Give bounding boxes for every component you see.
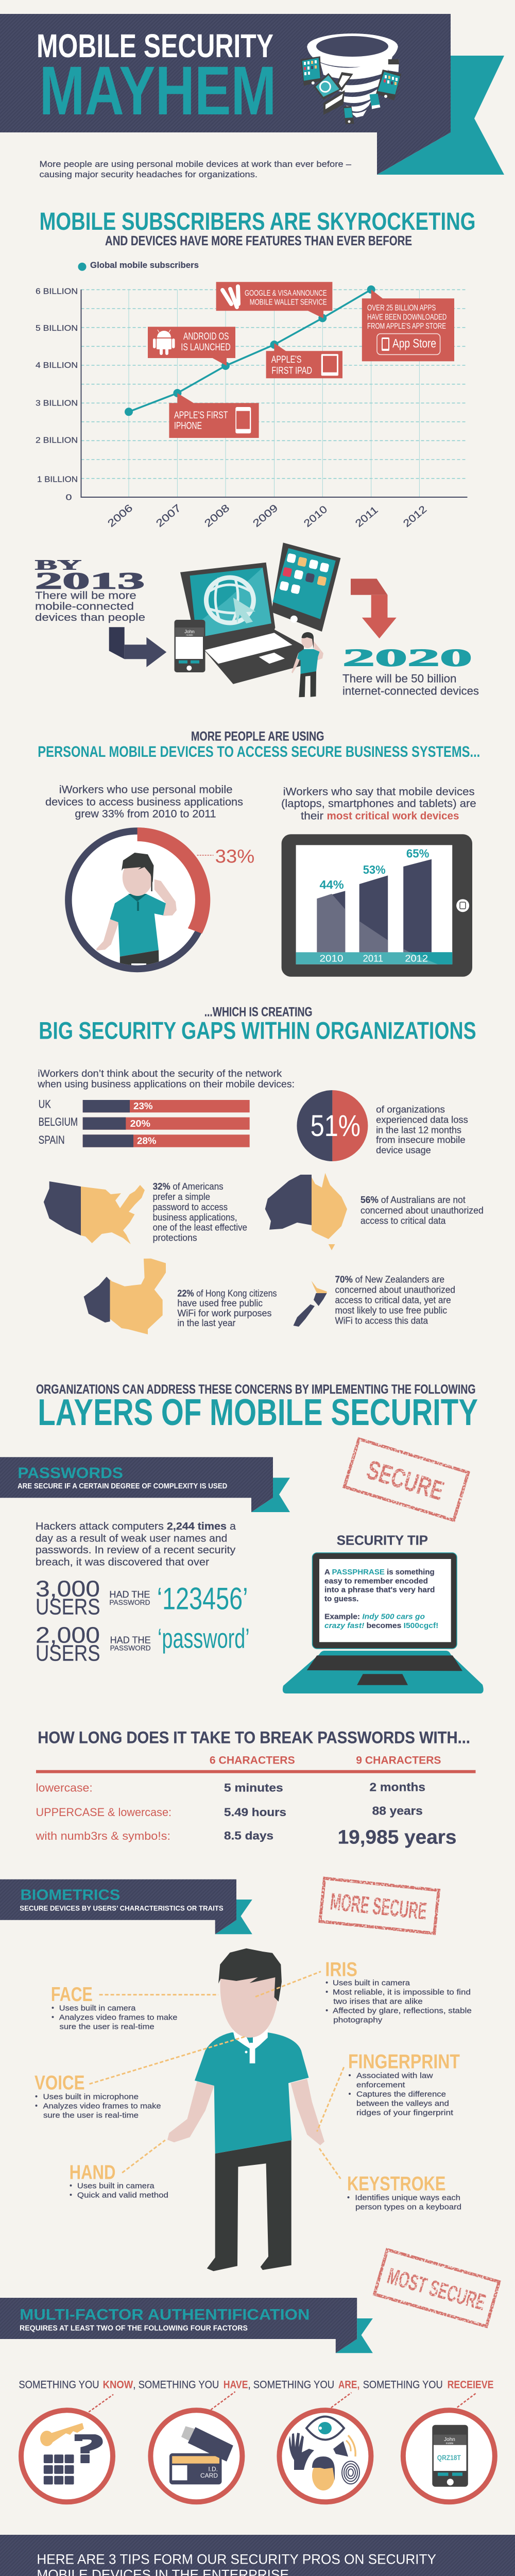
map stat: new zealand bbox=[294, 1274, 455, 1327]
security tip: laptop: SECURITY TIP bbox=[337, 1532, 428, 1548]
year strip: 2010 bbox=[319, 954, 343, 964]
laptop bbox=[180, 563, 304, 684]
security tip: laptop bbox=[283, 1532, 484, 1693]
year strip: 2012 bbox=[405, 954, 428, 964]
banner: passwords: PASSWORDS bbox=[18, 1465, 123, 1482]
icon: card reader bbox=[181, 2426, 233, 2462]
pie chart: 51%: from insecure mobile bbox=[376, 1135, 466, 1145]
callout: first ipad: APPLE'S bbox=[271, 354, 302, 365]
face bbox=[220, 1968, 279, 2038]
pie chart: 51%: 51% bbox=[311, 1109, 360, 1143]
row: lowercase: 2 months bbox=[370, 1781, 425, 1794]
year strip bbox=[296, 952, 452, 964]
text: iworkers personal devices bbox=[45, 784, 243, 820]
icon: phone with code bbox=[432, 2425, 468, 2487]
x axis years: 2011 bbox=[353, 504, 381, 530]
bar: belgium: BELGIUM bbox=[39, 1115, 78, 1128]
stat: 3,000 users: PASSWORD bbox=[109, 1598, 150, 1606]
row: numbers and symbols bbox=[35, 1826, 456, 1848]
label: keystroke: KEYSTROKE bbox=[347, 2173, 445, 2195]
x axis years: 2012 bbox=[401, 504, 429, 530]
y axis labels: 2 BILLION bbox=[36, 436, 78, 445]
text: by 2013: mobile-connected bbox=[35, 601, 134, 613]
x axis years: 2007 bbox=[154, 502, 183, 530]
text: hackers attack: Hackers attack computers 2,244 times a bbox=[36, 1521, 236, 1532]
laptop screen: to guess. bbox=[324, 1595, 358, 1603]
x axis years: 2010 bbox=[302, 504, 330, 530]
illustration: devices and person bbox=[174, 543, 340, 697]
heading: security gaps: ...WHICH IS CREATING bbox=[204, 1005, 312, 1019]
text: factors line: KNOW bbox=[103, 2379, 133, 2391]
arms bbox=[167, 2079, 324, 2145]
year strip: 2011 bbox=[363, 954, 383, 964]
label: voice: sure the user is real-time bbox=[43, 2111, 139, 2120]
callout: android os: ANDROID OS bbox=[183, 331, 229, 342]
stat: 3,000 users: 3,000 bbox=[36, 1576, 100, 1601]
bar: spain bbox=[39, 1133, 250, 1147]
icon: id card bbox=[169, 2453, 221, 2484]
phone: mobile bbox=[186, 634, 193, 636]
hair bbox=[218, 1948, 282, 2002]
row: mixed case: 88 years bbox=[372, 1804, 423, 1817]
pie chart: 51% bbox=[297, 1090, 468, 1161]
intro text: More people are using personal mobile devices at work than ever before – bbox=[39, 159, 352, 169]
intro text: causing major security headaches for organizations. bbox=[39, 170, 258, 179]
map stat: china: in the last year bbox=[177, 1318, 235, 1328]
x axis years bbox=[106, 502, 429, 530]
stat: 2,000 users: HAD THE bbox=[110, 1635, 151, 1645]
icon: phone with code: mobile bbox=[446, 2442, 454, 2445]
map stat: new zealand: WiFi to access this data bbox=[335, 1315, 428, 1326]
text: hackers attack: breach, it was discovered that over bbox=[36, 1556, 210, 1568]
intro text bbox=[39, 159, 352, 179]
table: time to break passwords bbox=[35, 1728, 476, 1848]
icon: eye bbox=[306, 2416, 344, 2440]
label: voice bbox=[35, 2036, 246, 2120]
callout: app store: FROM APPLE'S APP STORE bbox=[367, 322, 446, 331]
stat: 2,000 users: USERS bbox=[36, 1640, 100, 1666]
y axis labels bbox=[36, 287, 78, 502]
banner: multi-factor authentification: REQUIRES AT LEAST TWO OF THE FOLLOWING FOUR FACTORS bbox=[20, 2324, 248, 2332]
y axis labels: 3 BILLION bbox=[36, 399, 78, 408]
label: face: Analyzes video frames to make bbox=[59, 2013, 177, 2022]
bar: belgium: 20% bbox=[130, 1118, 150, 1129]
text: by 2013: 2013 bbox=[35, 568, 145, 594]
bar: uk bbox=[39, 1098, 250, 1112]
row: mixed case: UPPERCASE & lowercase: bbox=[36, 1806, 171, 1819]
map stat: new zealand: concerned about unauthorized bbox=[335, 1284, 455, 1295]
tips heading: HERE ARE 3 TIPS FORM OUR SECURITY PROS ON SECURITY bbox=[37, 2552, 436, 2567]
bar 2010 bbox=[317, 878, 345, 952]
text: factors line bbox=[19, 2379, 493, 2391]
stat: 3,000 users: HAD THE bbox=[109, 1589, 150, 1600]
callout: first iphone: APPLE'S FIRST bbox=[174, 410, 228, 421]
bar 2011: 53% bbox=[363, 863, 386, 876]
arrow: red, to 2020 bbox=[351, 579, 397, 638]
pie chart: 51%: device usage bbox=[376, 1145, 431, 1156]
factor: something you receive bbox=[403, 2394, 495, 2502]
bar 2012: 65% bbox=[406, 846, 430, 860]
label: voice: VOICE bbox=[35, 2072, 84, 2094]
chart: tablet with bars bbox=[282, 834, 472, 977]
text: hackers attack: passwords. In review of a recent security bbox=[36, 1545, 235, 1556]
icon: key bbox=[40, 2423, 84, 2446]
laptop screen: A PASSPHRASE is something bbox=[324, 1568, 435, 1577]
text: factors line: , SOMETHING YOU bbox=[248, 2379, 334, 2391]
label: face bbox=[51, 1984, 218, 2031]
factor: something you are bbox=[279, 2393, 371, 2502]
laptop base bbox=[283, 1651, 484, 1693]
label: fingerprint bbox=[317, 2050, 460, 2131]
bar: spain: 28% bbox=[137, 1136, 157, 1146]
table header: 9 CHARACTERS bbox=[356, 1754, 441, 1766]
laptop screen bbox=[312, 1553, 457, 1649]
icon: id card: CARD bbox=[200, 2472, 218, 2479]
label: face: Uses built in camera bbox=[59, 2004, 136, 2012]
icon: question mark bbox=[75, 2434, 103, 2463]
banner: passwords: ARE SECURE IF A CERTAIN DEGREE OF COMPLEXITY IS USED bbox=[18, 1482, 227, 1490]
heading: more people: MORE PEOPLE ARE USING bbox=[191, 729, 324, 743]
banner panel bbox=[0, 14, 451, 175]
banner: multi-factor authentification bbox=[0, 2298, 373, 2353]
laptop screen: into a phrase that's very hard bbox=[324, 1586, 435, 1595]
text: iworkers personal devices: devices to access business applications bbox=[45, 796, 243, 808]
callout: 33%: 33% bbox=[215, 845, 254, 867]
text: iworkers critical devices bbox=[281, 786, 476, 822]
label: voice: Analyzes video frames to make bbox=[43, 2102, 161, 2110]
row: lowercase bbox=[36, 1781, 425, 1794]
x axis years: 2008 bbox=[202, 502, 232, 530]
label: iris: two irises that are alike bbox=[333, 1997, 423, 2006]
text: factors line: , SOMETHING YOU bbox=[133, 2379, 219, 2391]
y axis labels: 6 BILLION bbox=[36, 287, 78, 296]
label: keystroke: person types on a keyboard bbox=[355, 2203, 461, 2212]
icon: hand bbox=[289, 2433, 314, 2470]
map stat: new zealand: access to critical data, yet are bbox=[335, 1295, 451, 1305]
table header: 6 CHARACTERS bbox=[210, 1754, 295, 1766]
heading: security gaps bbox=[39, 1005, 476, 1044]
map stat: united states: 32% of Americans bbox=[153, 1181, 224, 1192]
pie chart: 51%: of organizations bbox=[376, 1104, 445, 1114]
text: by 2013 bbox=[35, 557, 145, 623]
text: by 2013: BY bbox=[35, 557, 81, 573]
stat: 3,000 users bbox=[36, 1576, 248, 1619]
callout: google and visa: GOOGLE & VISA ANNOUNCE bbox=[245, 289, 327, 298]
text: network security: iWorkers don’t think about the security of the network bbox=[38, 1069, 282, 1079]
y axis labels: 5 BILLION bbox=[36, 324, 78, 333]
table: time to break passwords: HOW LONG DOES IT TAKE TO BREAK PASSWORDS WITH... bbox=[38, 1728, 470, 1747]
map stat: united states: prefer a simple bbox=[153, 1192, 210, 1202]
callout: first ipad: FIRST IPAD bbox=[271, 365, 312, 376]
bar 2010: 44% bbox=[319, 878, 344, 891]
stat: 2,000 users: PASSWORD bbox=[110, 1643, 151, 1652]
factor: something you have bbox=[150, 2392, 242, 2502]
text: iworkers personal devices: grew 33% from 2010 to 2011 bbox=[75, 808, 216, 820]
text: by 2013: devices than people bbox=[35, 612, 145, 623]
label: iris bbox=[255, 1958, 472, 2025]
label: iris: Uses built in camera bbox=[333, 1978, 410, 1987]
bar: spain: SPAIN bbox=[39, 1133, 65, 1146]
label: face: FACE bbox=[51, 1984, 93, 2006]
bar chart: countries bbox=[39, 1098, 250, 1147]
label: iris: Most reliable, it is impossible to find bbox=[333, 1988, 471, 1997]
callout: 33% bbox=[197, 845, 254, 867]
callout: app store: App Store bbox=[392, 337, 436, 351]
map stat: china: have used free public bbox=[177, 1298, 263, 1309]
y axis labels: 0 bbox=[66, 494, 72, 502]
row: numbers and symbols: 8.5 days bbox=[224, 1829, 273, 1842]
text: hackers attack: day as a result of weak user names and bbox=[36, 1533, 227, 1544]
title: mobile security: MOBILE SECURITY bbox=[37, 27, 273, 64]
row: numbers and symbols: 19,985 years bbox=[338, 1826, 456, 1848]
label: hand: HAND bbox=[70, 2161, 115, 2183]
pie chart: 51%: in the last 12 months bbox=[376, 1125, 461, 1135]
label: voice: Uses built in microphone bbox=[43, 2092, 139, 2101]
factor: something you know bbox=[21, 2395, 113, 2502]
text: iworkers personal devices: iWorkers who use personal mobile bbox=[59, 784, 233, 795]
callout: app store: HAVE BEEN DOWNLOADED bbox=[367, 313, 447, 322]
heading: mobile subscribers: AND DEVICES HAVE MORE FEATURES THAN EVER BEFORE bbox=[105, 233, 412, 248]
banner: multi-factor authentification: MULTI-FACTOR AUTHENTIFICATION bbox=[20, 2307, 310, 2324]
text: 2020 bbox=[342, 644, 479, 697]
stat: 2,000 users bbox=[36, 1622, 250, 1666]
title: mayhem: MAYHEM bbox=[39, 53, 276, 129]
map stat: new zealand: 70% of New Zealanders are bbox=[335, 1274, 444, 1284]
label: keystroke: Identifies unique ways each bbox=[355, 2194, 460, 2202]
phone bbox=[174, 620, 205, 672]
label: hand: Uses built in camera bbox=[77, 2182, 154, 2191]
banner: biometrics: SECURE DEVICES BY USERS’ CHARACTERISTICS OR TRAITS bbox=[20, 1904, 224, 1912]
person on phone bbox=[96, 853, 177, 974]
collar and placket bbox=[233, 2029, 268, 2063]
bar: belgium bbox=[39, 1115, 250, 1130]
text: hackers attack bbox=[36, 1521, 236, 1568]
map stat: new zealand: most likely to use free public bbox=[335, 1305, 447, 1315]
label: face: sure the user is real-time bbox=[60, 2022, 154, 2031]
map stat: australia bbox=[265, 1173, 484, 1250]
figure: standing person bbox=[167, 1948, 324, 2271]
label: hand: Quick and valid method bbox=[77, 2191, 168, 2200]
pants bbox=[207, 2140, 291, 2271]
map stat: united states: business applications, bbox=[153, 1212, 237, 1223]
stamp: more secure bbox=[320, 1878, 439, 1934]
row: numbers and symbols: with numb3rs & symbo!s: bbox=[35, 1829, 170, 1842]
stamp: secure bbox=[345, 1439, 468, 1520]
arrow: navy, to devices bbox=[109, 627, 166, 667]
map stat: united states: one of the least effective bbox=[153, 1223, 247, 1233]
label: hand bbox=[70, 2140, 168, 2200]
panel: three tips bbox=[0, 2535, 515, 2576]
callout: app store bbox=[362, 290, 454, 361]
stamp: more secure: MORE SECURE bbox=[329, 1888, 428, 1925]
y axis labels: 1 BILLION bbox=[37, 475, 78, 484]
icon: face bbox=[312, 2456, 335, 2490]
callout: android os: IS LAUNCHED bbox=[181, 342, 231, 353]
icon: speaker bbox=[333, 2435, 355, 2456]
banner: biometrics bbox=[0, 1879, 252, 1934]
text: network security bbox=[37, 1069, 295, 1090]
map stat: china: WiFi for work purposes bbox=[177, 1308, 271, 1318]
row: mixed case: 5.49 hours bbox=[224, 1806, 286, 1819]
callout: first ipad bbox=[266, 343, 342, 378]
header banner bbox=[0, 14, 504, 175]
text: network security: when using business applications on their mobile devices: bbox=[37, 1079, 295, 1090]
text: iworkers critical devices: most critical work devices bbox=[327, 810, 459, 822]
map stat: australia: concerned about unauthorized bbox=[360, 1205, 484, 1215]
callout: google and visa bbox=[216, 282, 332, 318]
stamp: secure: SECURE bbox=[363, 1455, 447, 1506]
label: fingerprint: FINGERPRINT bbox=[348, 2050, 460, 2073]
table header bbox=[36, 1754, 476, 1773]
text: 2020: There will be 50 billion bbox=[342, 672, 456, 685]
banner: passwords bbox=[0, 1457, 290, 1512]
donut segment bbox=[138, 827, 210, 934]
stat: 3,000 users: ‘123456’ bbox=[157, 1581, 248, 1616]
laptop screen: crazy fast! becomes I500cgcf! bbox=[324, 1621, 438, 1630]
callout: first iphone bbox=[169, 393, 259, 438]
small person bbox=[291, 632, 323, 697]
label: fingerprint: between the valleys and bbox=[356, 2099, 449, 2108]
map stat: united states: password to access bbox=[153, 1202, 228, 1212]
label: keystroke bbox=[319, 2148, 461, 2212]
label: fingerprint: Associated with law bbox=[356, 2071, 433, 2080]
chart: 33% donut with person bbox=[65, 827, 254, 974]
text: factors line: HAVE bbox=[224, 2379, 248, 2391]
icon: fingerprint bbox=[342, 2461, 359, 2484]
label: fingerprint: Captures the difference bbox=[356, 2090, 446, 2098]
tablet bbox=[271, 543, 340, 632]
text: iworkers critical devices: (laptops, smartphones and tablets) are bbox=[281, 798, 476, 810]
laptop screen: easy to remember encoded bbox=[324, 1577, 428, 1585]
label: fingerprint: enforcement bbox=[356, 2080, 405, 2089]
text: iworkers critical devices: iWorkers who say that mobile devices bbox=[283, 786, 475, 798]
text: factors line: RECEIEVE bbox=[448, 2379, 493, 2391]
row: mixed case bbox=[36, 1804, 423, 1819]
label: iris: photography bbox=[333, 2016, 383, 2025]
label: iris: IRIS bbox=[325, 1958, 357, 1980]
data line bbox=[125, 285, 375, 416]
stamp: most secure bbox=[374, 2250, 499, 2326]
label: fingerprint: ridges of your fingerprint bbox=[356, 2108, 454, 2117]
stat: 2,000 users: 2,000 bbox=[36, 1622, 100, 1648]
row: lowercase: 5 minutes bbox=[224, 1781, 283, 1794]
icon: phone with code: QRZ18T bbox=[437, 2453, 461, 2462]
text: factors line: SOMETHING YOU bbox=[19, 2379, 99, 2391]
callout: first iphone: IPHONE bbox=[174, 421, 202, 432]
line chart: global mobile subscribers bbox=[36, 261, 468, 530]
x axis years: 2006 bbox=[106, 502, 135, 530]
stat: 3,000 users: USERS bbox=[36, 1594, 100, 1619]
text: 2020: internet-connected devices bbox=[342, 684, 479, 697]
map stat: china bbox=[84, 1259, 277, 1334]
heading: more people bbox=[38, 729, 480, 760]
icon: keypad bbox=[44, 2454, 74, 2484]
legend: Global mobile subscribers bbox=[90, 261, 199, 270]
bar 2011 bbox=[359, 863, 388, 952]
bar: uk: UK bbox=[39, 1098, 51, 1111]
y axis labels: 4 BILLION bbox=[36, 361, 78, 370]
callout: app store: OVER 25 BILLION APPS bbox=[367, 304, 436, 313]
laptop screen: Example: Indy 500 cars go bbox=[324, 1613, 425, 1621]
tips heading bbox=[37, 2552, 436, 2576]
callout: google and visa: MOBILE WALLET SERVICE bbox=[250, 298, 327, 307]
bar 2012 bbox=[403, 846, 432, 952]
stat: 2,000 users: ‘password’ bbox=[158, 1623, 250, 1654]
text: by 2013: There will be more bbox=[35, 590, 136, 601]
map stat: united states: protections bbox=[153, 1232, 197, 1243]
phone: John bbox=[184, 629, 195, 634]
x axis years: 2009 bbox=[251, 502, 280, 530]
map stat: united states bbox=[44, 1181, 247, 1244]
pie chart: 51%: experienced data loss bbox=[376, 1114, 468, 1125]
banner: biometrics: BIOMETRICS bbox=[21, 1887, 120, 1903]
text: 2020: 2020 bbox=[342, 644, 472, 671]
home button bbox=[456, 899, 469, 912]
map stat: australia: 56% of Australians are not bbox=[360, 1195, 466, 1205]
ribbon tail bbox=[377, 56, 504, 175]
callout: android os bbox=[148, 327, 235, 366]
icon: tornado of devices bbox=[301, 33, 401, 124]
heading: mobile subscribers bbox=[39, 208, 476, 248]
row: lowercase: lowercase: bbox=[36, 1781, 93, 1794]
text: iworkers critical devices: their bbox=[301, 810, 323, 822]
shirt bbox=[195, 2032, 309, 2154]
icon: id card: I.D. bbox=[208, 2466, 218, 2473]
map stat: china: 22% of Hong Kong citizens bbox=[177, 1289, 277, 1299]
text: factors line: ARE, bbox=[338, 2379, 359, 2391]
icon: phone with code: John bbox=[444, 2437, 455, 2443]
label: iris: Affected by glare, reflections, stable bbox=[333, 2007, 472, 2015]
bar: uk: 23% bbox=[133, 1101, 153, 1111]
map stat: australia: access to critical data bbox=[360, 1216, 446, 1226]
text: factors line: SOMETHING YOU bbox=[363, 2379, 443, 2391]
